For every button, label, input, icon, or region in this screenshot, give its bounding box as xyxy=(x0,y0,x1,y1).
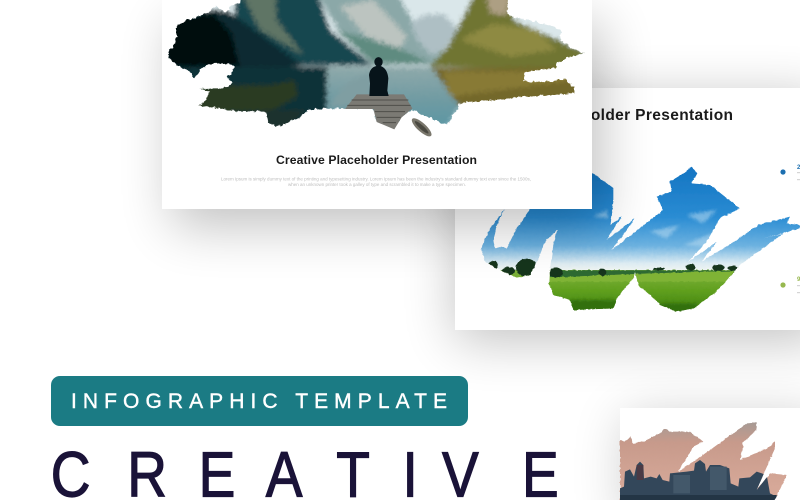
image: city skyline in brush stroke xyxy=(620,422,786,500)
icon: wooden dock xyxy=(345,94,412,129)
text: body copy: when an unknown printer took a galley of type and scrambled it to make a type specimen. xyxy=(288,182,466,187)
icon: trees on the horizon xyxy=(489,259,739,277)
icon: seated person xyxy=(369,57,389,96)
legend: green item xyxy=(780,277,800,293)
slide: city skyline xyxy=(610,408,800,500)
heading: slide two title: Creative Placeholder Presentation xyxy=(470,107,733,124)
badge: infographic template xyxy=(51,376,468,426)
heading: slide one title: Creative Placeholder Presentation xyxy=(276,153,477,167)
image: mountain lake in brush stroke xyxy=(160,0,593,139)
badge: infographic template: INFOGRAPHIC TEMPLATE xyxy=(71,390,447,413)
icon: rowing boat xyxy=(409,116,434,139)
slide: mountain lake xyxy=(160,0,602,227)
image: sky and field in brush stroke xyxy=(477,165,800,313)
slide: blue sky and green field xyxy=(455,88,800,341)
text: body copy xyxy=(221,176,531,187)
text: body copy: Lorem Ipsum is simply dummy text of the printing and typesetting industry. Lorem Ipsum has been the industry's standard dummy text ever since the 1500s, xyxy=(221,176,531,182)
legend: blue item xyxy=(780,165,800,180)
